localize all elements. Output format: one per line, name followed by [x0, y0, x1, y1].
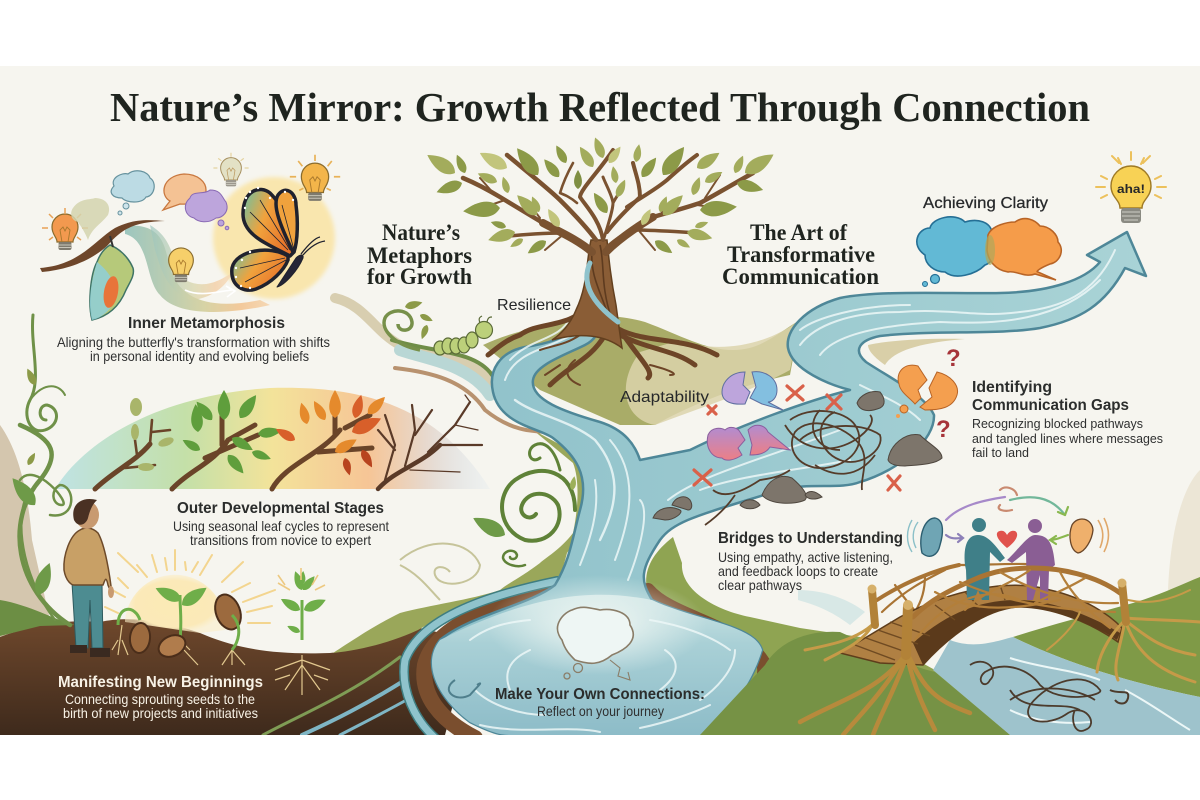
tangled lines [705, 410, 881, 525]
branches [463, 150, 753, 252]
heading: art of transformative communication: Transformative [727, 242, 875, 267]
icon: seed sprouts [112, 568, 330, 695]
sun rays [105, 550, 275, 623]
text: outer developmental stages [173, 500, 389, 548]
text: outer developmental stages: Using seasonal leaf cycles to represent [173, 518, 389, 534]
river: main channel and pool [432, 232, 1146, 735]
text: make your own connections: Reflect on your journey [537, 703, 664, 719]
icon: broken purple-blue bubble [722, 372, 783, 410]
tangle curl [1110, 690, 1128, 704]
icon: broken pink cloud [707, 425, 790, 460]
vine: left climbing vine [7, 315, 71, 625]
text: outer developmental stages: transitions from novice to expert [190, 532, 371, 548]
swirl in pool [449, 680, 480, 697]
heading: nature's metaphors: for Growth [367, 264, 472, 289]
left bank [700, 632, 1010, 735]
heading: nature's metaphors: Metaphors [367, 243, 472, 268]
vine: pale tendril [400, 544, 480, 600]
river banks around pool [404, 581, 764, 738]
flowing ribbon [125, 226, 270, 312]
tree: bare winter branches [378, 395, 482, 489]
thought cloud in pool [557, 607, 633, 680]
icon: purple cloud [185, 190, 229, 230]
icon: butterfly [232, 187, 325, 290]
icon: blue thought cloud [917, 217, 996, 286]
people with heart and ears [908, 488, 1108, 600]
distant tan hills [0, 425, 1200, 640]
text: bridges to understanding: and feedback loops to create [718, 563, 878, 579]
person and seeds illustration [64, 499, 330, 695]
sun glow [125, 575, 225, 633]
tree hill and tan ground [483, 316, 800, 425]
text: bridges to understanding: Using empathy, active listening, [718, 549, 893, 565]
text: inner metamorphosis: Aligning the butterfly's transformation with shifts [57, 334, 330, 350]
right bank and lower river [1013, 577, 1200, 697]
vine: swirl near river [470, 444, 577, 566]
feedback arrows [946, 488, 1068, 544]
trunk [552, 240, 622, 348]
tree roots [486, 314, 720, 388]
icon: faded top bulb [213, 153, 249, 186]
heading: nature's metaphors [367, 220, 472, 289]
tree: autumn orange leaves [272, 390, 388, 489]
text: manifesting new beginnings: Connecting sprouting seeds to the [65, 691, 255, 707]
panel: communication gaps obstacles [653, 345, 961, 525]
left outer stream [263, 657, 410, 735]
text: identifying communication gaps: Communication Gaps [972, 397, 1129, 414]
text: inner metamorphosis: Inner Metamorphosis [128, 315, 285, 332]
icon: orange speech bubble [987, 219, 1061, 280]
branch [40, 220, 165, 272]
chrysalis [90, 236, 133, 320]
canopy leaves [424, 136, 777, 257]
panel: butterfly metamorphosis illustration [40, 153, 340, 320]
icon: orange speech bubble [163, 174, 206, 210]
rocks [653, 392, 942, 520]
tree: summer green leaves [172, 390, 282, 489]
bridge front rail and lattice [913, 568, 1120, 640]
right hill beside pool [646, 537, 1010, 735]
bridge deck and arch [840, 585, 1122, 665]
text: identifying communication gaps [972, 379, 1163, 460]
bridge posts and roots [800, 578, 1200, 735]
tree: spring buds [95, 398, 175, 489]
icon: question marks: ? [936, 416, 951, 443]
left hill beside river [333, 433, 582, 653]
text: inner metamorphosis: in personal identity and evolving beliefs [90, 348, 309, 364]
panel: seasonal leaf band [55, 388, 490, 489]
text: identifying communication gaps: and tangled lines where messages [972, 431, 1163, 446]
icon: two figures [965, 518, 1055, 600]
tangled water lines [970, 662, 1100, 731]
text: bridges to understanding [718, 530, 903, 593]
sun glow [213, 177, 335, 299]
icon: red crosses [694, 386, 900, 490]
label: achieving clarity: Achieving Clarity [923, 195, 1048, 212]
heading: art of transformative communication [722, 220, 879, 289]
icon: aha lightbulb: aha! [1117, 182, 1145, 196]
text: make your own connections [495, 686, 705, 719]
icon: center bulb [169, 248, 193, 282]
heading: nature's metaphors: Nature’s [382, 220, 460, 245]
icon: broken orange bubble [896, 365, 958, 418]
icon: heart [997, 531, 1017, 548]
panel: soil ground [0, 619, 470, 735]
text: manifesting new beginnings: birth of new projects and initiatives [63, 705, 258, 721]
text: identifying communication gaps: Identifying [972, 379, 1052, 396]
heading: art of transformative communication: Communication [722, 264, 879, 289]
text: inner metamorphosis [57, 315, 330, 364]
person [64, 499, 114, 657]
bridge back rail and lattice [877, 564, 1052, 620]
heading: art of transformative communication: The Art of [750, 220, 847, 245]
tree [424, 136, 777, 385]
icon: right glowing bulb [290, 155, 340, 201]
river flow lines [470, 250, 1115, 732]
left stream ribbons [335, 298, 553, 432]
icon: aha lightbulb [1096, 152, 1166, 223]
icon: caterpillar [434, 316, 492, 355]
green slope at left of soil [0, 600, 75, 636]
title: Nature’s Mirror: Growth Reflected Through Connection [110, 84, 1090, 130]
text: make your own connections: Make Your Own Connections: [495, 686, 705, 703]
text: manifesting new beginnings [58, 674, 263, 721]
icon: tan thought cloud [71, 198, 109, 240]
text: bridges to understanding: Bridges to Understanding [718, 530, 903, 547]
pale stream behind bridge [798, 590, 865, 625]
icon: question marks [936, 345, 961, 443]
icon: question marks: ? [946, 345, 961, 372]
label: resilience: Resilience [497, 297, 571, 314]
right side: speech clouds for clarity [917, 217, 1061, 286]
icon: blue thought cloud [111, 171, 154, 215]
blue strand through trunk [587, 263, 618, 322]
icon: blue ear [908, 518, 942, 556]
tan curve under arrow [868, 339, 965, 365]
vine: swirl and caterpillar [384, 299, 492, 355]
label: adaptability: Adaptability [620, 389, 709, 406]
text: outer developmental stages: Outer Developmental Stages [177, 500, 384, 517]
text: identifying communication gaps: Recognizing blocked pathways [972, 416, 1143, 431]
text: manifesting new beginnings: Manifesting New Beginnings [58, 674, 263, 691]
icon: left orange bulb [42, 208, 88, 250]
text: identifying communication gaps: fail to land [972, 445, 1029, 460]
icon: orange ear [1070, 518, 1108, 553]
bridge scene [57, 84, 1200, 735]
text: bridges to understanding: clear pathways [718, 577, 802, 593]
